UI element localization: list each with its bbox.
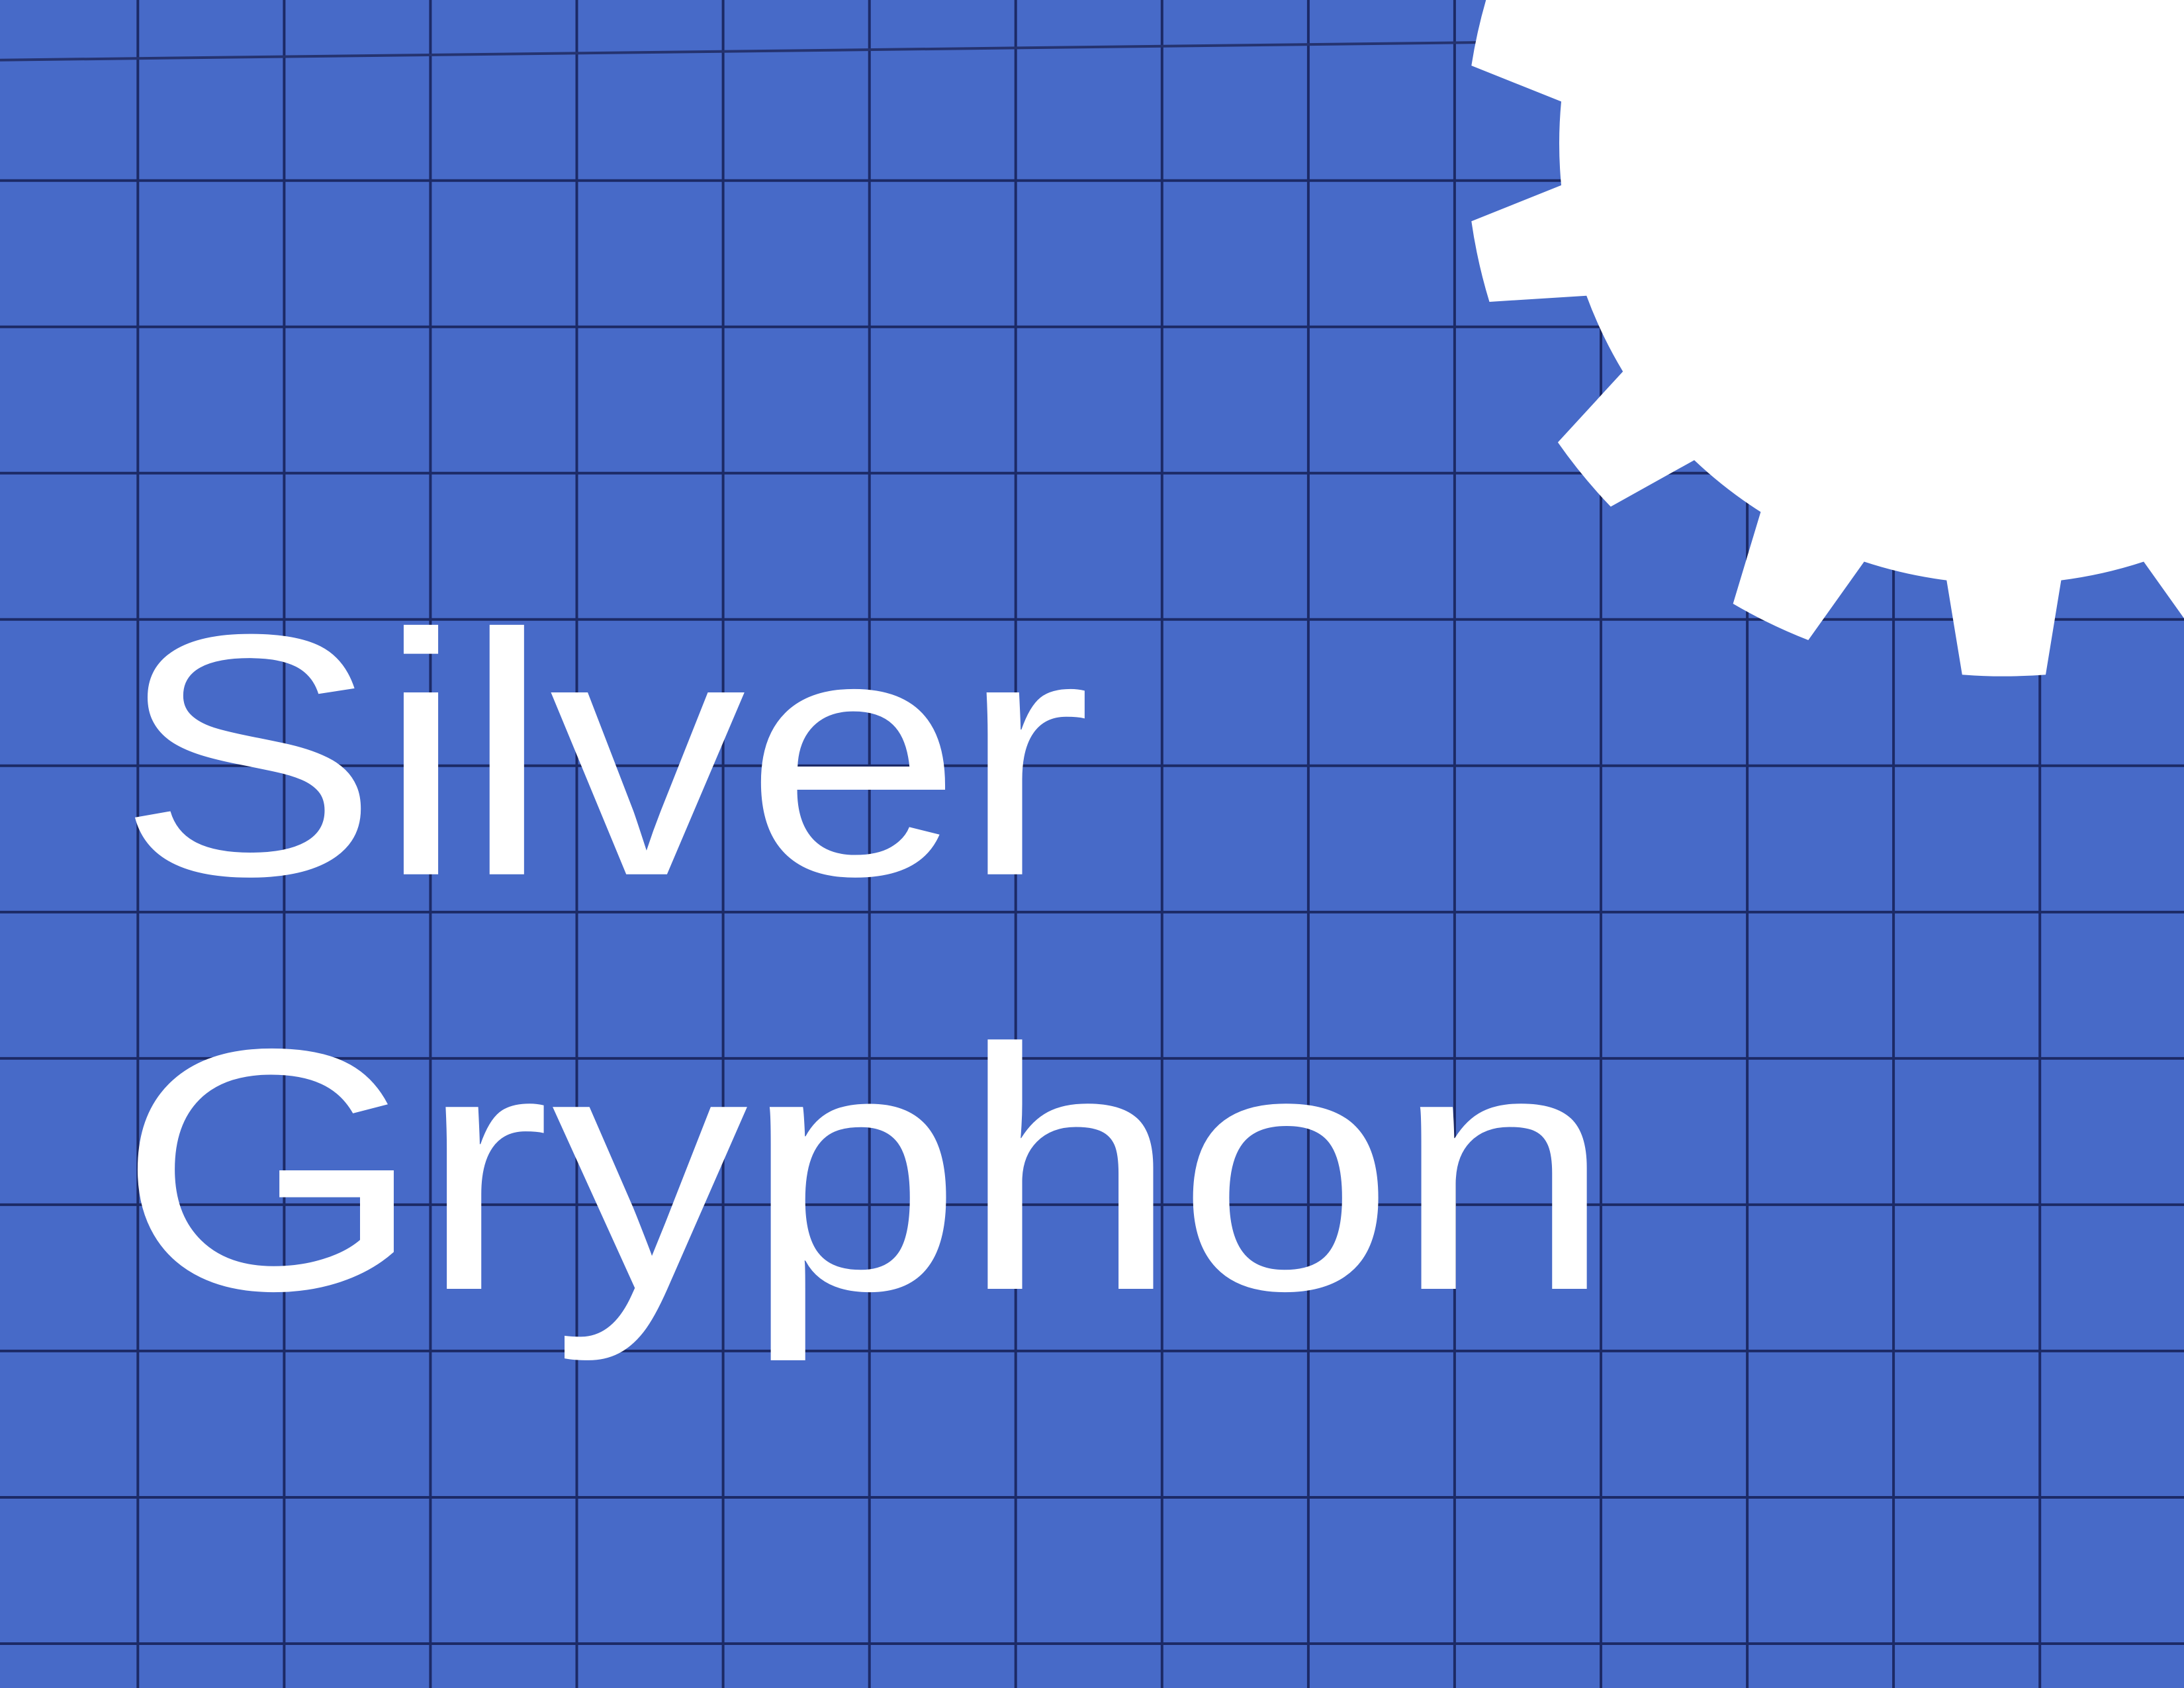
title: Silver Gryphon: [117, 563, 1612, 1364]
title: Silver Gryphon: Gryphon: [118, 978, 1612, 1364]
title: Silver Gryphon: Silver: [117, 563, 1091, 948]
icon: white gear: [1471, 0, 2184, 677]
